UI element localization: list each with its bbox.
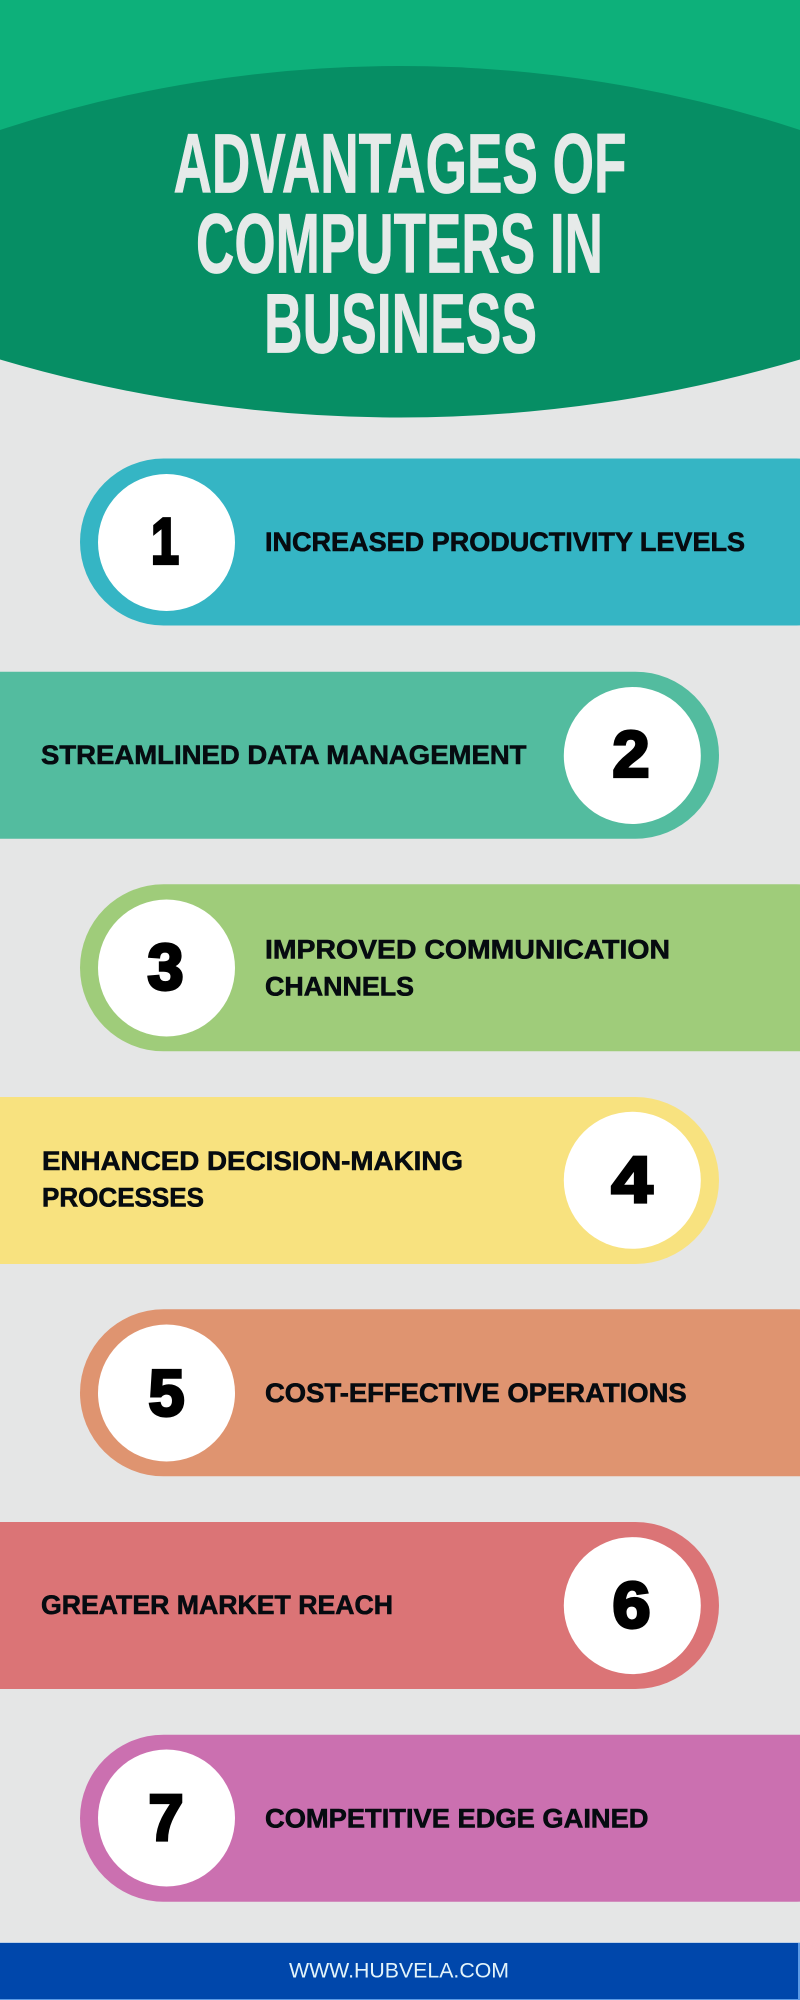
item 5: COST-EFFECTIVE OPERATIONS [265, 1378, 687, 1408]
item 7: COMPETITIVE EDGE GAINED [265, 1803, 648, 1833]
header lens shape [0, 66, 800, 418]
item 3: 3 [148, 930, 184, 1004]
item 3 [80, 884, 800, 1051]
item 7 [80, 1735, 800, 1902]
item 6 [0, 1522, 719, 1689]
item 6: GREATER MARKET REACH [41, 1590, 393, 1620]
item 7: 7 [148, 1781, 184, 1854]
item 2: STREAMLINED DATA MANAGEMENT [41, 740, 526, 770]
footer url: WWW.HUBVELA.COM [289, 1959, 509, 1982]
item 4 [0, 1097, 719, 1264]
item 4: PROCESSES [42, 1183, 204, 1213]
item 2 [0, 672, 719, 839]
item 1: 1 [151, 504, 179, 578]
footer bar [0, 1943, 800, 2000]
item 1 [80, 458, 800, 626]
title: BUSINESS [264, 277, 537, 371]
item 4: ENHANCED DECISION-MAKING [42, 1146, 463, 1176]
item 5 [80, 1309, 800, 1476]
item 4: 4 [612, 1143, 652, 1216]
item 6: 6 [612, 1568, 650, 1642]
item 1: INCREASED PRODUCTIVITY LEVELS [265, 527, 745, 557]
header banner [0, 0, 800, 418]
item 5: 5 [148, 1356, 184, 1430]
title [174, 117, 626, 371]
item 3: CHANNELS [265, 971, 414, 1001]
item 3: IMPROVED COMMUNICATION [265, 934, 670, 964]
item 2: 2 [612, 718, 650, 790]
